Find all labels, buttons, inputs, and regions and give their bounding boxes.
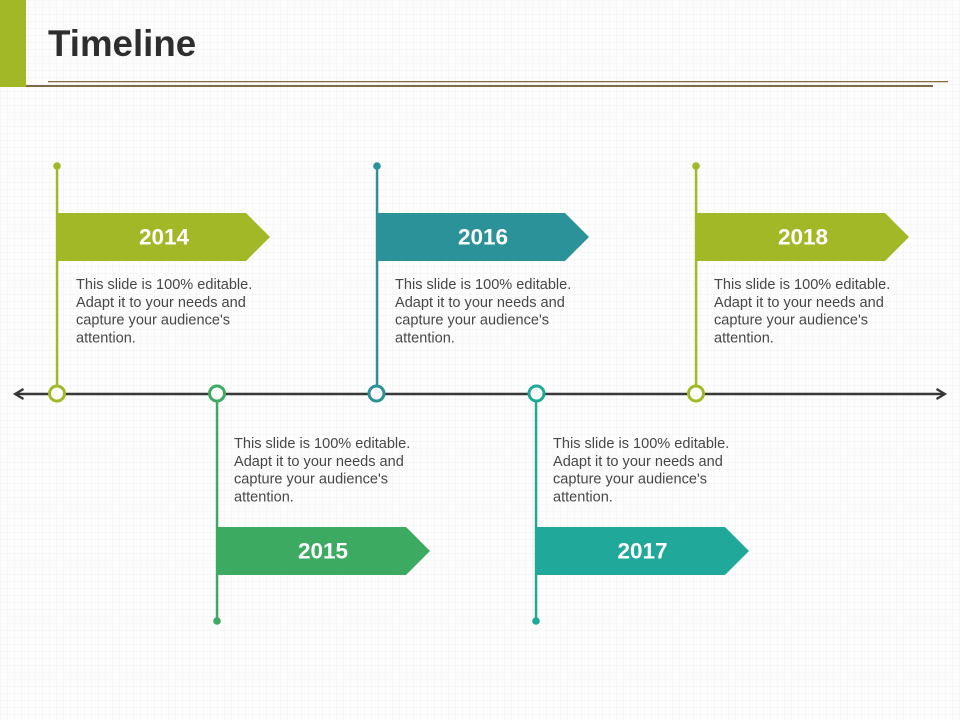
title: Timeline <box>48 23 196 64</box>
description 2015: attention. <box>234 490 294 506</box>
description 2016: This slide is 100% editable. <box>395 277 571 293</box>
node 2015 <box>210 386 224 401</box>
description 2018: Adapt it to your needs and <box>714 295 884 311</box>
flag pole 2017 <box>532 400 540 625</box>
banner 2017 <box>536 527 749 575</box>
flag pole 2018 <box>692 162 700 386</box>
banner 2015 <box>217 527 430 575</box>
banner 2014: 2014 <box>139 224 190 250</box>
banner 2016 <box>377 213 589 261</box>
description 2018: capture your audience's <box>714 313 868 329</box>
banner 2016: 2016 <box>458 224 508 250</box>
timeline axis with arrows <box>15 389 945 399</box>
description 2017: This slide is 100% editable. <box>553 436 729 452</box>
node 2018 <box>688 386 704 401</box>
node 2017 <box>529 386 544 401</box>
flag pole 2016 <box>373 162 381 386</box>
description 2017: Adapt it to your needs and <box>553 454 723 470</box>
description 2015: capture your audience's <box>234 472 388 488</box>
banner 2015: 2015 <box>298 538 348 564</box>
banner 2018 <box>696 213 909 261</box>
description 2016: Adapt it to your needs and <box>395 295 565 311</box>
banner 2018: 2018 <box>778 224 828 250</box>
milestone 2014 <box>50 162 270 401</box>
description 2017: attention. <box>553 490 613 506</box>
description 2015: This slide is 100% editable. <box>234 436 410 452</box>
flag pole 2015 <box>213 400 221 625</box>
description 2014: Adapt it to your needs and <box>76 295 246 311</box>
banner 2014 <box>57 213 270 261</box>
node 2014 <box>50 386 64 401</box>
header accent block <box>0 0 26 87</box>
description 2014: This slide is 100% editable. <box>76 277 252 293</box>
description 2018: attention. <box>714 331 774 347</box>
milestone 2018 <box>688 162 909 401</box>
node 2016 <box>369 386 384 401</box>
milestone 2015 <box>210 386 430 625</box>
header rules <box>26 81 948 87</box>
description 2015: Adapt it to your needs and <box>234 454 404 470</box>
description 2018: This slide is 100% editable. <box>714 277 890 293</box>
description 2016: capture your audience's <box>395 313 549 329</box>
flag pole 2014 <box>53 162 61 386</box>
banner 2017: 2017 <box>617 538 668 564</box>
description 2016: attention. <box>395 331 455 347</box>
milestone 2016 <box>369 162 589 401</box>
description 2014: attention. <box>76 331 136 347</box>
description 2014: capture your audience's <box>76 313 230 329</box>
milestone 2017 <box>529 386 749 625</box>
description 2017: capture your audience's <box>553 472 707 488</box>
